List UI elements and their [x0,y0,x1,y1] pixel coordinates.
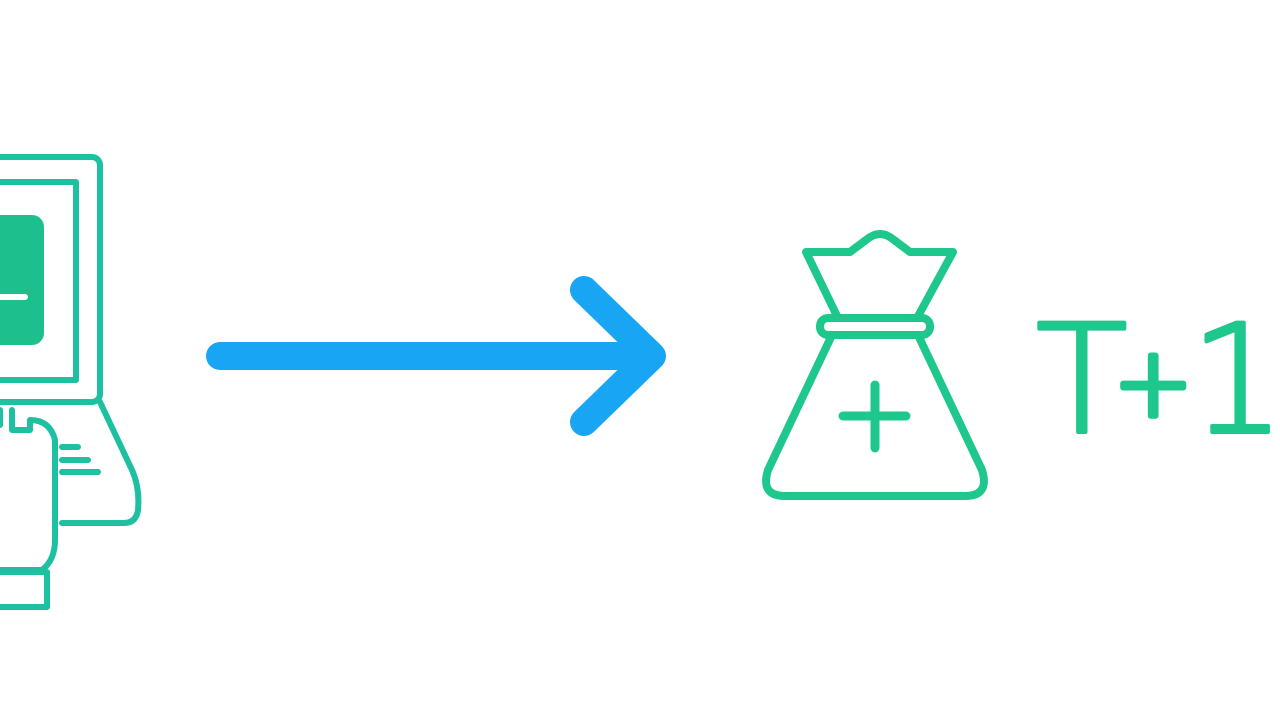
text: T+1: T [1036,294,1128,468]
text: T+1: + [1113,327,1193,439]
icon: laptop with hand [0,157,138,607]
icon: money bag with plus [766,234,984,496]
arrow [220,290,652,422]
text: T+1 [1036,294,1280,468]
